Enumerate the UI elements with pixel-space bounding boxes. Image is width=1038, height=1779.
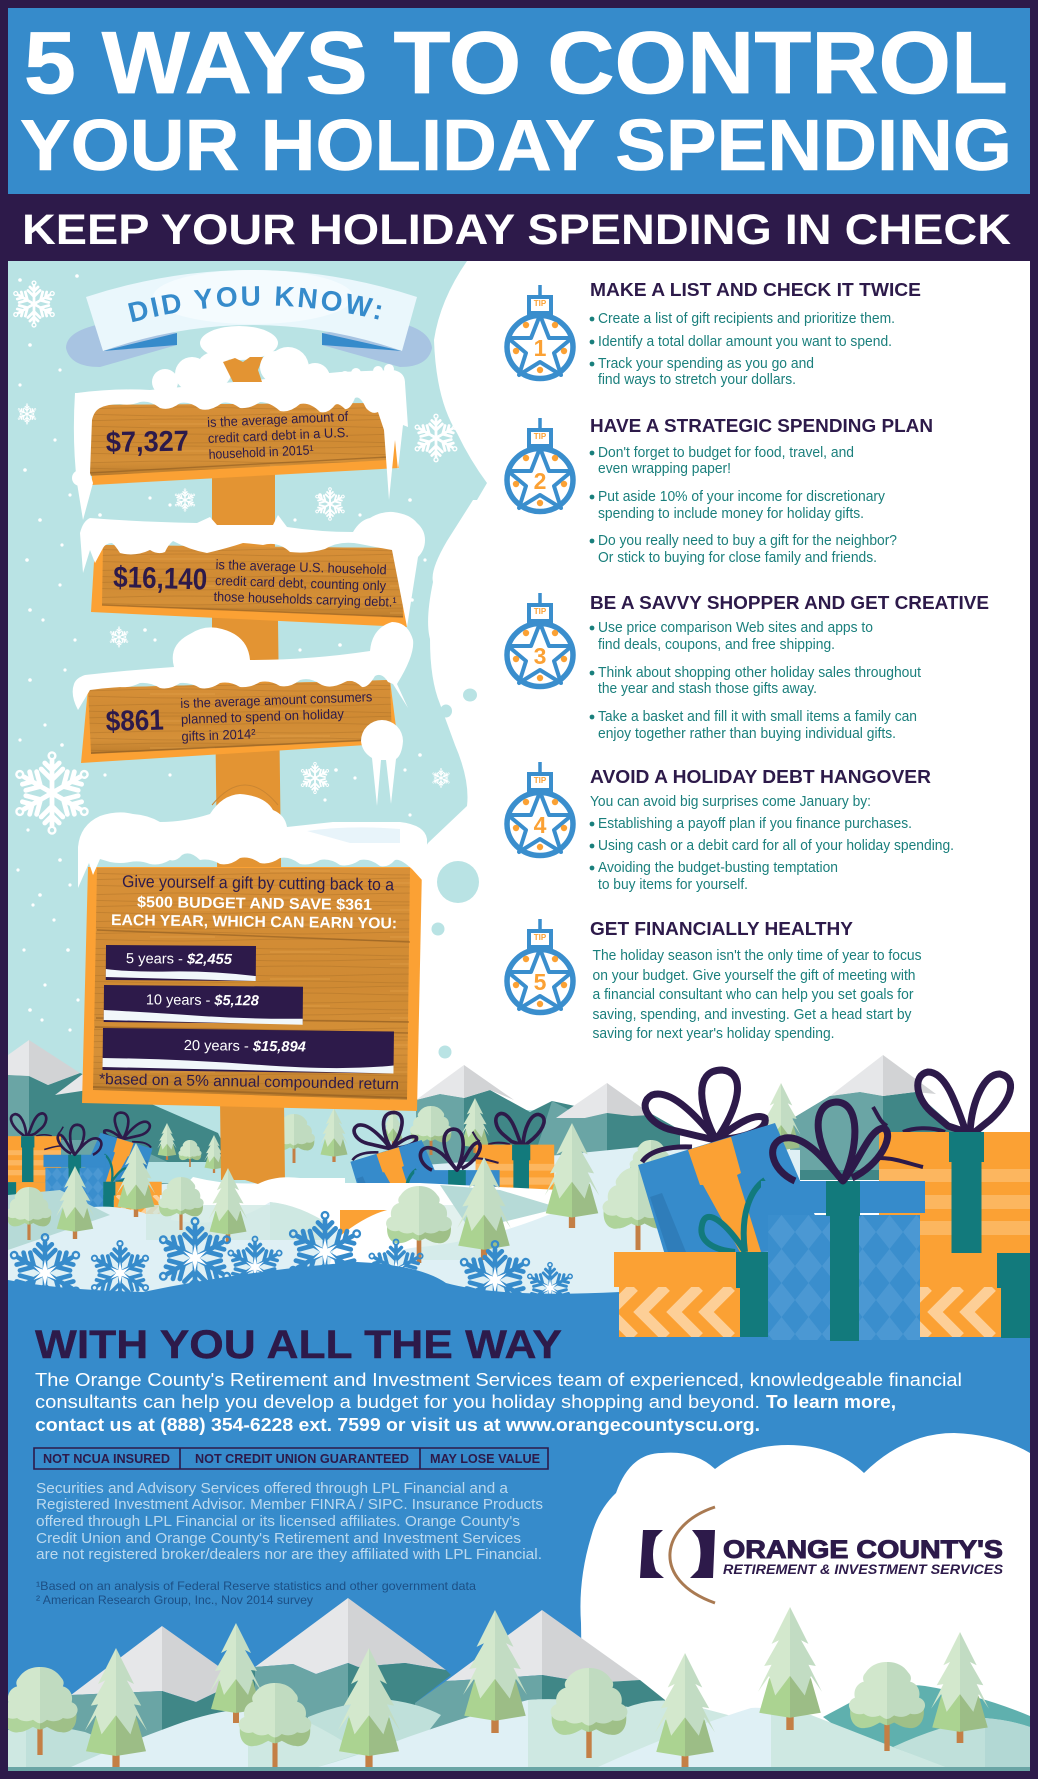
logo tagline: RETIREMENT & INVESTMENT SERVICES	[723, 1562, 1003, 1577]
tip 1 list: find ways to stretch your dollars.	[598, 372, 796, 388]
highlight text: $500 BUDGET AND SAVE $361	[137, 894, 373, 914]
tip 2 list: Or stick to buying for close family and friends.	[598, 550, 877, 566]
post bump	[212, 785, 278, 805]
description	[207, 409, 350, 462]
snow	[73, 622, 413, 710]
ornament 2	[507, 418, 573, 512]
trees	[2, 1607, 989, 1768]
description: those households carrying debt.¹	[213, 589, 397, 610]
tip 2 list: Do you really need to buy a gift for the neighbor?	[598, 533, 897, 549]
description: credit card debt, counting only	[215, 573, 387, 593]
amount: $7,327	[106, 426, 189, 459]
banner folds	[103, 333, 402, 351]
amount: $16,140	[113, 561, 208, 596]
ornament 3: TIP	[534, 607, 547, 616]
foreground trees mid	[6, 1123, 673, 1263]
tip 5 paragraph: saving, spending, and investing. Get a head start by	[592, 1007, 912, 1023]
small gifts left	[4, 1113, 164, 1216]
hills back	[140, 1147, 800, 1300]
back trees	[157, 1083, 800, 1190]
snow	[80, 512, 425, 627]
disclosure box: NOT NCUA INSURED	[43, 1452, 170, 1466]
small gifts middle	[335, 1112, 554, 1253]
description: gifts in 2014²	[181, 726, 256, 744]
snow ball with icicles	[361, 720, 403, 806]
footer: with you all the way	[34, 1323, 962, 1607]
ornament 3	[507, 593, 573, 686]
ground stripe	[8, 1767, 1030, 1771]
amount: $861	[105, 704, 164, 738]
tip 1 list: Track your spending as you go and	[598, 356, 814, 372]
sign 4: savings	[78, 785, 427, 1111]
post top stub	[223, 357, 263, 382]
tip 5 paragraph: on your budget. Give yourself the gift of meeting with	[592, 968, 916, 984]
bar: 20 years	[102, 1028, 394, 1074]
fine print: Registered Investment Advisor. Member FINRA / SIPC. Insurance Products	[36, 1497, 543, 1513]
tip 1 list: Create a list of gift recipients and prioritize them.	[598, 311, 895, 327]
logo brackets	[640, 1530, 715, 1578]
ornament 5	[507, 919, 573, 1012]
snow	[78, 794, 427, 888]
panel: did you know snow background	[8, 261, 560, 1200]
subtitle: KEEP YOUR HOLIDAY SPENDING IN CHECK	[22, 206, 1011, 254]
tip 5 paragraph: The holiday season isn't the only time of year to focus	[592, 948, 922, 964]
tip 5 paragraph	[592, 948, 922, 1042]
tip 3 list: find deals, coupons, and free shipping.	[598, 637, 835, 653]
description: credit card debt in a U.S.	[208, 425, 349, 446]
snow mound and foreground hills	[8, 1177, 650, 1300]
ornament 2: TIP	[534, 432, 547, 441]
tip 2 list	[590, 445, 897, 566]
mountains	[71, 1598, 665, 1768]
tip 4	[507, 762, 954, 893]
ornament 1: TIP	[534, 299, 547, 308]
tip 3	[507, 593, 989, 742]
bar: 20 years: 20 years - $15,894	[184, 1038, 306, 1055]
title line 1: 5 WAYS TO CONTROL	[24, 13, 1008, 112]
disclosure box: NOT CREDIT UNION GUARANTEED	[195, 1452, 409, 1466]
banner tail left	[66, 323, 177, 367]
ornament 1	[507, 285, 573, 378]
banner tail right	[322, 323, 432, 367]
tip 4 list: You can avoid big surprises come January by:	[590, 794, 871, 810]
bar: 10 years	[104, 985, 303, 1025]
panel: bottom blue section	[8, 1262, 1030, 1768]
signpost lower	[214, 620, 285, 1184]
tip 5 paragraph: saving for next year's holiday spending.	[592, 1026, 834, 1042]
tip 3 list: the year and stash those gifts away.	[598, 681, 817, 697]
footer paragraph: The Orange County's Retirement and Investment Services team of experienced, knowledgeable financial	[35, 1369, 962, 1390]
tip 1 list	[590, 311, 895, 388]
description: planned to spend on holiday	[181, 706, 344, 727]
logo name: ORANGE COUNTY'S	[723, 1536, 1003, 1564]
title line 2: YOUR HOLIDAY SPENDING	[20, 106, 1012, 186]
sign 3: holiday gift spending	[73, 622, 413, 806]
tip 2 list: spending to include money for holiday gifts.	[598, 506, 864, 522]
tip 4 list: Using cash or a debit card for all of your holiday spending.	[598, 838, 954, 854]
banner heading: DID YOU KNOW:	[128, 286, 382, 322]
tip 4 list: Establishing a payoff plan if you finance purchases.	[598, 816, 912, 832]
tip 4 list: to buy items for yourself.	[598, 877, 748, 893]
description: is the average U.S. household	[215, 557, 387, 577]
banner: did you know	[66, 270, 432, 367]
decorative circles	[432, 688, 479, 1058]
ornament 1: 1	[534, 335, 547, 361]
blue snowflakes	[6, 1212, 575, 1319]
footer paragraph	[35, 1369, 962, 1435]
footer paragraph: contact us at (888) 354-6228 ext. 7599 or visit us at www.orangecountyscu.org.	[35, 1414, 760, 1435]
highlight text	[111, 894, 397, 932]
sign 2: household debt	[80, 512, 425, 627]
bottom landscape	[2, 1598, 1030, 1771]
sources	[36, 1579, 476, 1607]
tip 5	[507, 919, 922, 1042]
ornament 4: 4	[534, 812, 547, 838]
description	[180, 689, 374, 744]
footer paragraph: consultants can help you develop a budget for you holiday shopping and beyond.	[35, 1391, 760, 1412]
description: is the average amount consumers	[180, 689, 373, 711]
heading 3: BE A SAVVY SHOPPER AND GET CREATIVE	[590, 593, 989, 613]
tip 3 list: Use price comparison Web sites and apps to	[598, 620, 873, 636]
white content background	[8, 261, 1030, 1301]
tip 1	[507, 280, 921, 388]
fine print: offered through LPL Financial or its licensed affiliates. Orange County's	[36, 1514, 520, 1530]
ornament 4	[507, 762, 573, 856]
snow and icicles	[72, 326, 408, 520]
logo	[640, 1507, 1003, 1603]
tip 3 list: enjoy together rather than buying individual gifts.	[598, 726, 896, 742]
banner ribbon	[86, 270, 417, 351]
fine print: are not registered broker/dealers nor are they affiliated with LPL Financial.	[36, 1547, 542, 1563]
tip 4 list: Avoiding the budget-busting temptation	[598, 860, 838, 876]
ornament 4: TIP	[534, 776, 547, 785]
tip 1 list: Identify a total dollar amount you want to spend.	[598, 334, 892, 350]
description: is the average amount of	[207, 409, 349, 430]
tip 5 paragraph: a financial consultant who can help you set goals for	[592, 987, 914, 1003]
mountains mid scene	[8, 1040, 960, 1200]
heading 1: MAKE A LIST AND CHECK IT TWICE	[590, 280, 921, 300]
heading 4: AVOID A HOLIDAY DEBT HANGOVER	[590, 767, 931, 787]
disclosure box: MAY LOSE VALUE	[430, 1452, 540, 1466]
disclosure box	[34, 1448, 548, 1469]
ornament 5: 5	[534, 969, 547, 995]
tip 3 list: Take a basket and fill it with small items a family can	[598, 709, 917, 725]
title banner	[8, 8, 1030, 194]
bar: 10 years: 10 years - $5,128	[146, 992, 260, 1009]
white cloud	[580, 1433, 1030, 1770]
description	[213, 557, 398, 610]
tip 3 list: Think about shopping other holiday sales throughout	[598, 665, 921, 681]
fine print	[36, 1481, 543, 1563]
hills	[8, 1685, 1030, 1768]
large gift boxes	[609, 1070, 1030, 1341]
logo arc	[670, 1507, 715, 1603]
bar: 5 years	[106, 945, 256, 981]
heading 2: HAVE A STRATEGIC SPENDING PLAN	[590, 416, 933, 436]
sources: ² American Research Group, Inc., Nov 2014 survey	[36, 1593, 313, 1607]
sign 1: average credit card debt	[72, 326, 408, 520]
tip 2 list: even wrapping paper!	[598, 461, 731, 477]
tip 2 list: Don't forget to budget for food, travel, and	[598, 445, 854, 461]
tip 2 list: Put aside 10% of your income for discretionary	[598, 489, 886, 505]
heading 5: GET FINANCIALLY HEALTHY	[590, 919, 853, 939]
highlight text: EACH YEAR, WHICH CAN EARN YOU:	[111, 912, 397, 932]
tip 2	[507, 416, 933, 566]
signpost	[212, 470, 275, 630]
intro text: Give yourself a gift by cutting back to a	[122, 872, 395, 894]
footer heading: WITH YOU ALL THE WAY	[35, 1323, 562, 1367]
description: household in 2015¹	[208, 442, 314, 462]
sources: ¹Based on an analysis of Federal Reserve statistics and other government data	[36, 1579, 476, 1593]
bar: 5 years: 5 years - $2,455	[126, 951, 233, 968]
footer paragraph: To learn more,	[766, 1391, 896, 1412]
fine print: Credit Union and Orange County's Retirement and Investment Services	[36, 1531, 521, 1547]
tip 4 list	[590, 794, 954, 893]
ornament 3: 3	[534, 643, 546, 669]
ornament 2: 2	[534, 468, 546, 494]
footnote: *based on a 5% annual compounded return	[99, 1071, 399, 1093]
small snowflakes	[11, 281, 460, 834]
ornament 5: TIP	[534, 933, 547, 942]
tip 3 list	[590, 620, 921, 742]
fine print: Securities and Advisory Services offered through LPL Financial and a	[36, 1481, 509, 1497]
